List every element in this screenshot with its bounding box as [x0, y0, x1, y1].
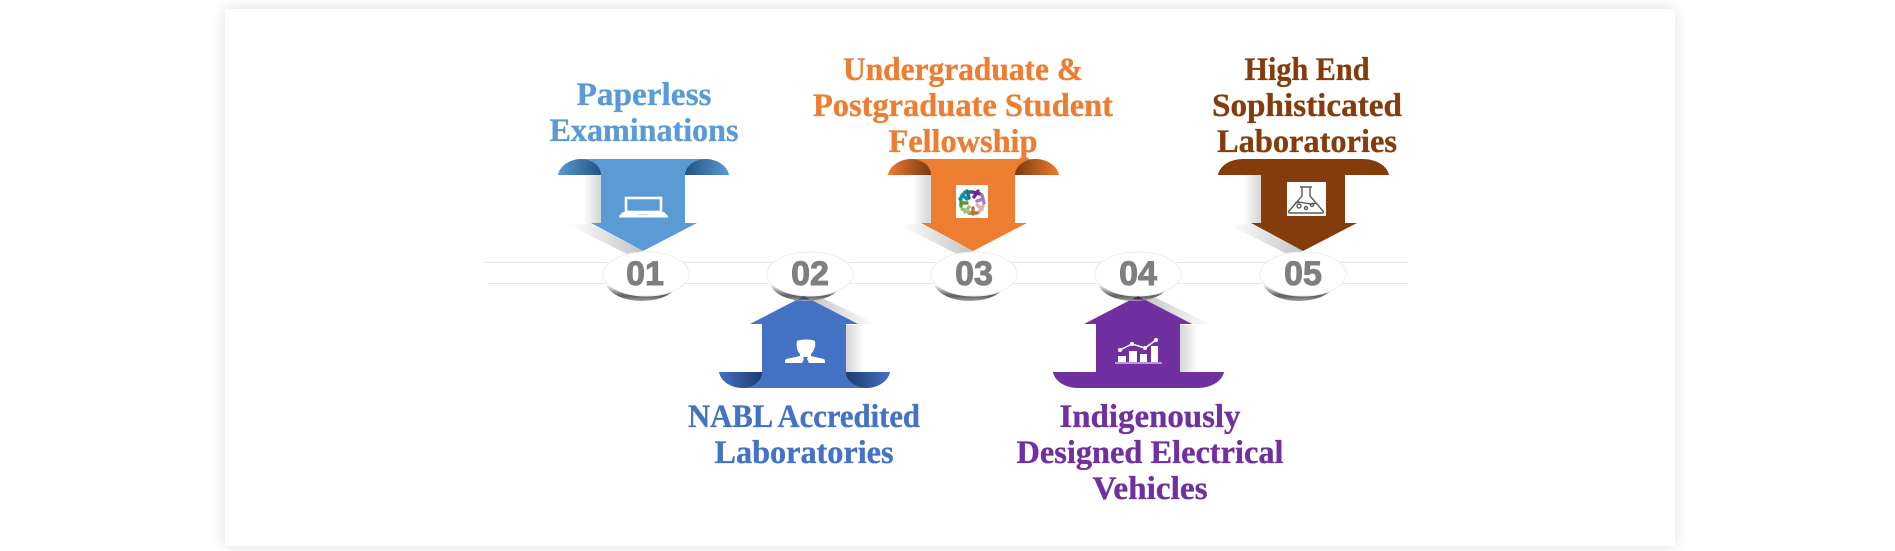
step badge 04 [1095, 252, 1181, 301]
step badge 01: 01 [626, 255, 664, 293]
step badge 04: 04 [1119, 255, 1157, 293]
label: Paperless Examinations: Paperless [576, 77, 712, 113]
label: Paperless Examinations: Examinations [550, 113, 739, 149]
label: NABL Accredited Laboratories: Laboratories [714, 435, 894, 471]
icon: people circle [956, 185, 988, 218]
label: NABL Accredited Laboratories: NABL Accredited [688, 399, 920, 435]
label: Indigenously Designed Electrical Vehicles [1016, 399, 1284, 507]
step badge 03: 03 [955, 255, 993, 293]
label: High End Sophisticated Laboratories: Sophisticated [1212, 88, 1402, 124]
arrow 01: paperless examinations [558, 159, 729, 255]
arrow 05: high end sophisticated laboratories [1218, 159, 1389, 255]
up arrow tips over badges [798, 296, 1144, 300]
icon: person [785, 340, 825, 363]
label: High End Sophisticated Laboratories: Laboratories [1217, 124, 1397, 160]
label: NABL Accredited Laboratories [688, 399, 920, 471]
label: Paperless Examinations [550, 77, 739, 149]
label: High End Sophisticated Laboratories: High End [1244, 52, 1370, 88]
step badge 02 [767, 252, 853, 301]
timeline rails [484, 262, 1409, 284]
label: High End Sophisticated Laboratories [1212, 52, 1402, 160]
label: Undergraduate and Postgraduate Student Fellowship: Undergraduate & [843, 52, 1083, 88]
step badge 05: 05 [1284, 255, 1322, 293]
label: Indigenously Designed Electrical Vehicles: Designed Electrical [1016, 435, 1284, 471]
step badge 03 [931, 252, 1017, 301]
arrow 03: student fellowship [888, 159, 1059, 255]
label: Undergraduate and Postgraduate Student Fellowship: Postgraduate Student [813, 88, 1113, 124]
arrow 02: NABL accredited laboratories [719, 296, 890, 388]
step badge 05 [1260, 252, 1346, 301]
label: Undergraduate and Postgraduate Student Fellowship: Fellowship [888, 124, 1038, 160]
icon: flask [1287, 182, 1326, 216]
label: Indigenously Designed Electrical Vehicles: Vehicles [1092, 471, 1208, 507]
step badge 02: 02 [791, 255, 829, 293]
arrow 04: indigenously designed electrical vehicles [1053, 296, 1224, 388]
icon: laptop [619, 198, 668, 218]
label: Indigenously Designed Electrical Vehicles: Indigenously [1060, 399, 1241, 435]
label: Undergraduate and Postgraduate Student Fellowship [813, 52, 1113, 160]
step badge 01 [603, 252, 689, 301]
panel: white card [225, 9, 1675, 546]
icon: bar chart with trend line [1115, 338, 1162, 364]
